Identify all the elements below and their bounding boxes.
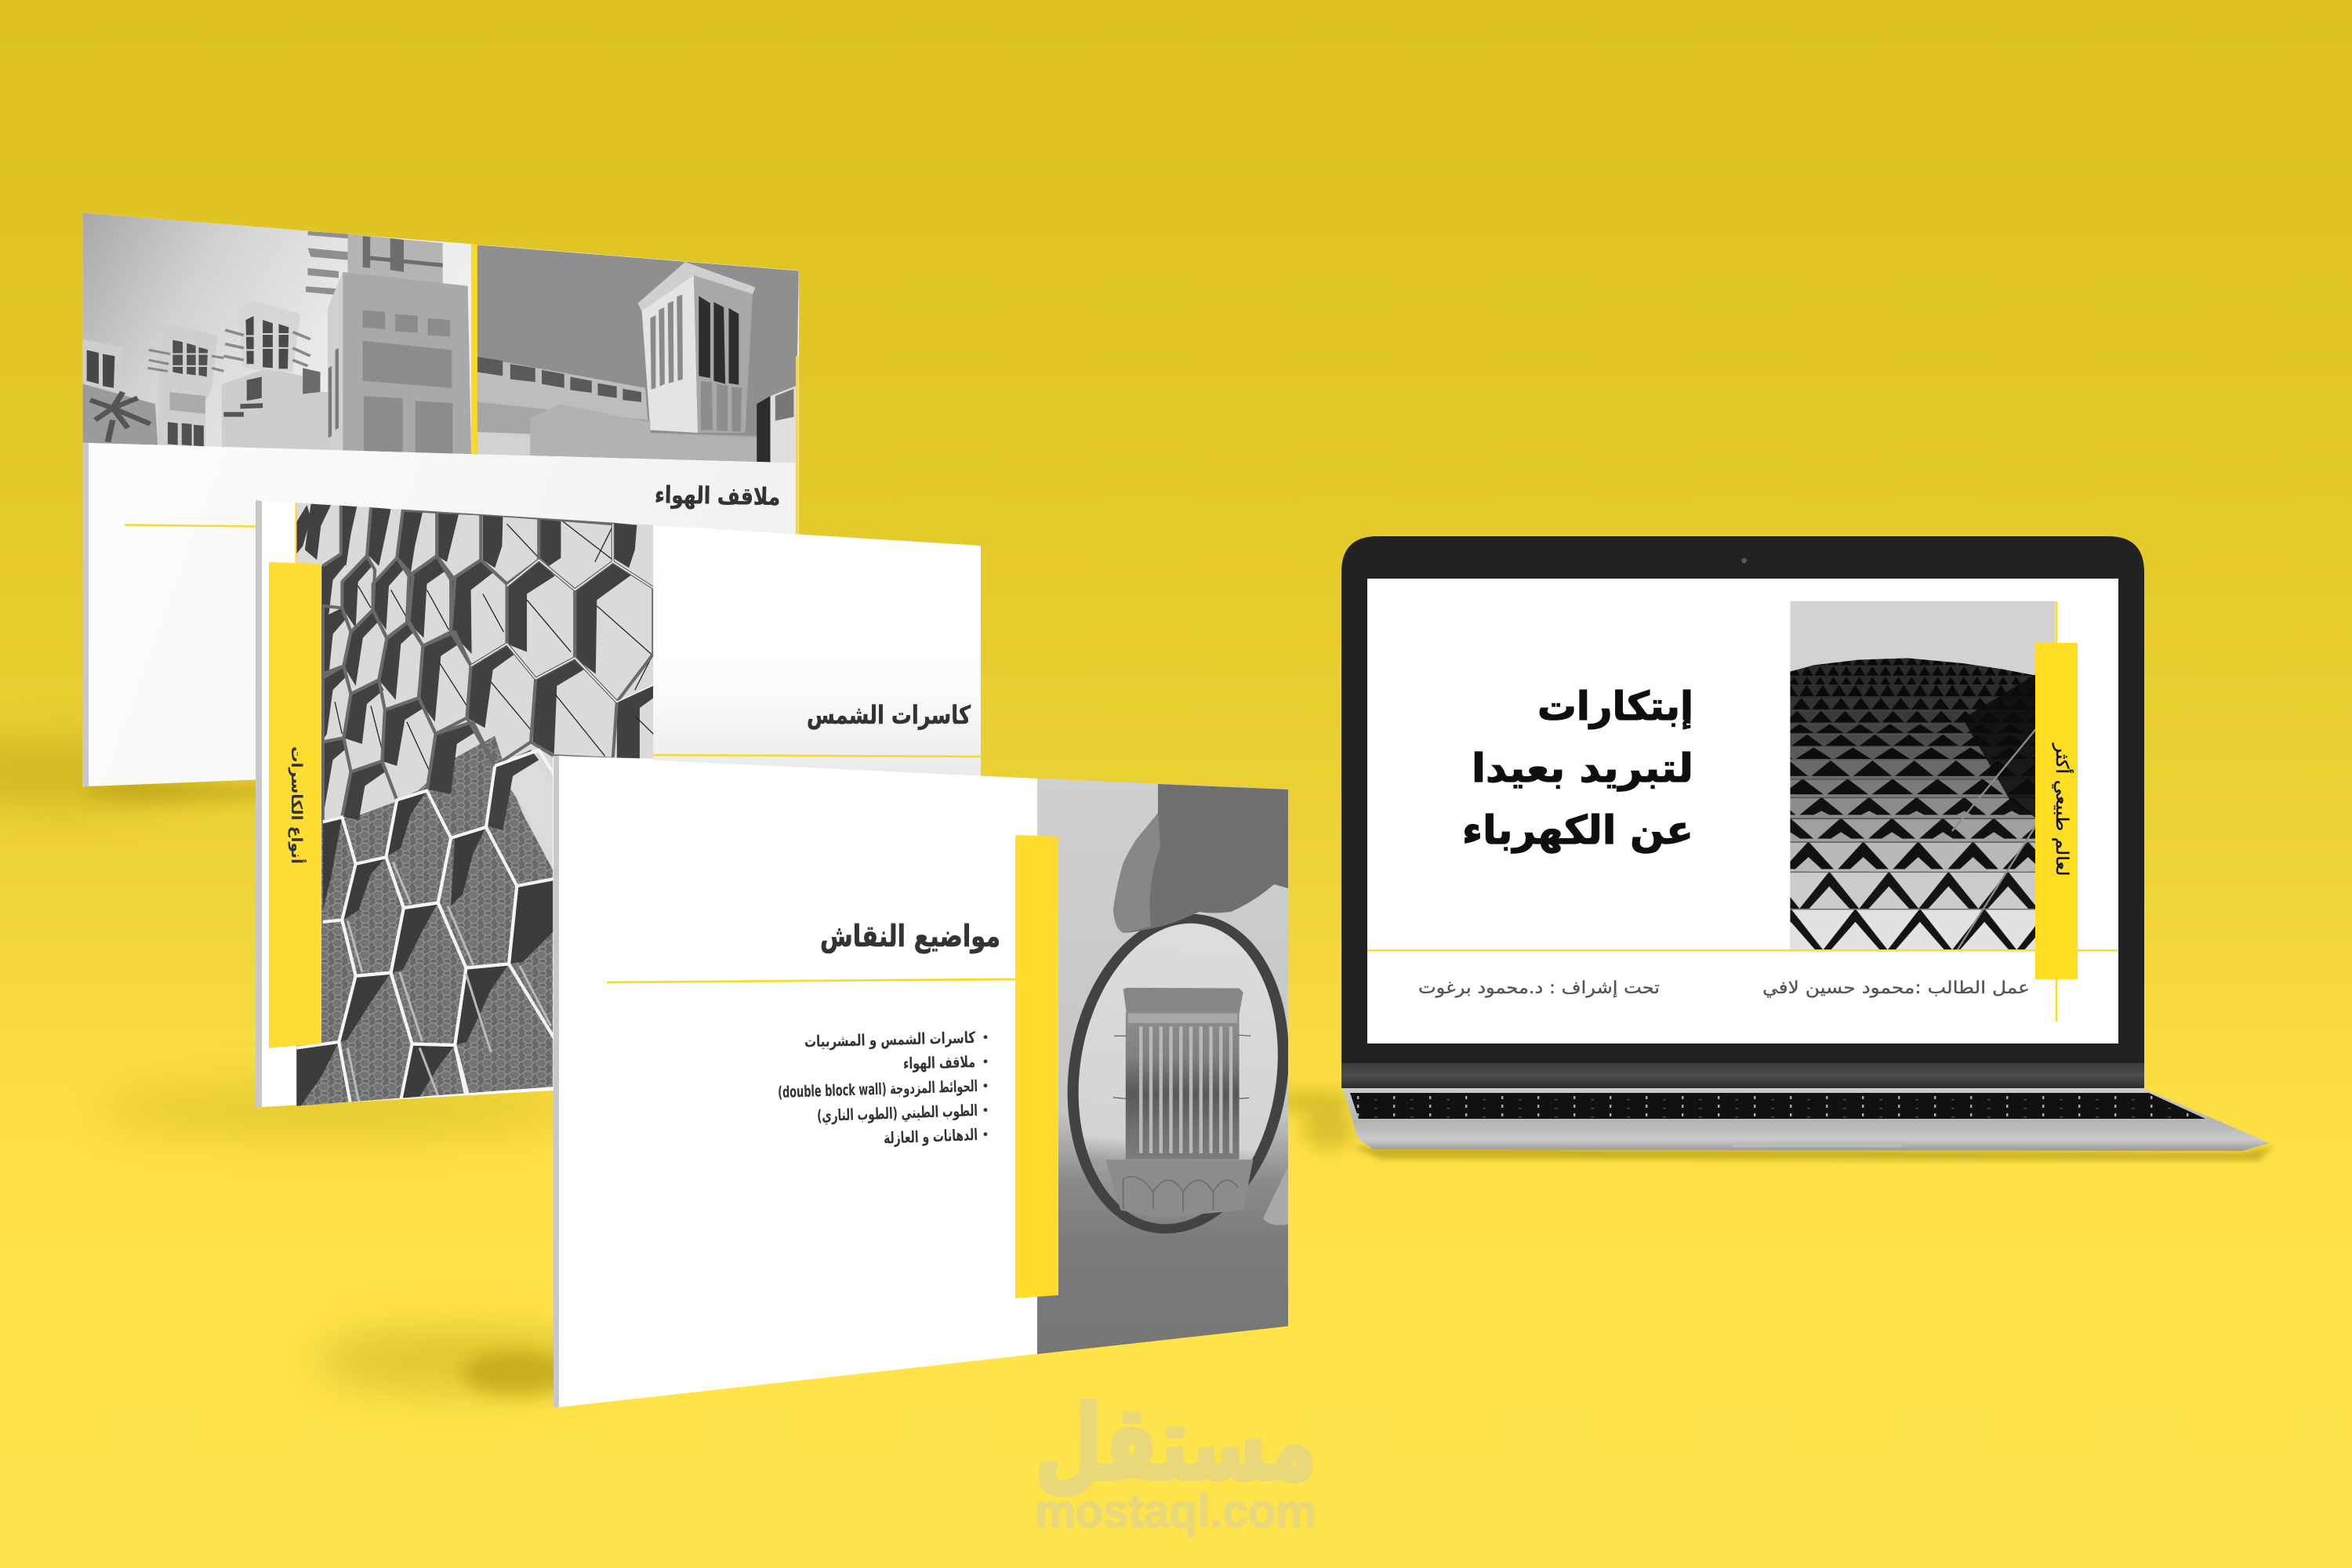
supervisor credit: تحت إشراف : د.محمود برغوت: [1418, 978, 1660, 998]
yellow edge line: [796, 356, 798, 535]
topics list: [778, 1028, 988, 1148]
rotated tab label: أنواع الكاسرات: [288, 746, 307, 864]
title line 2: لتبريد بعيدا: [1472, 746, 1693, 792]
yellow divider: [653, 755, 981, 757]
watermark arabic: مستقل: [1035, 1384, 1317, 1503]
inner frame strips: [347, 862, 551, 1102]
card 3 spine and page: [554, 756, 1037, 1407]
card 2 spine and page: [256, 500, 981, 1108]
yellow divider: [607, 979, 1015, 982]
tower inside lens: [1105, 988, 1253, 1218]
photo: hexagon facade: [291, 494, 659, 1118]
heading: wind catchers: ملاقف الهواء: [655, 481, 780, 511]
photo: wind towers left: [83, 212, 471, 454]
yellow thread: [2056, 601, 2057, 1022]
yellow divider: [125, 525, 256, 527]
photo divider: [471, 244, 477, 455]
laptop: [1341, 536, 2270, 1151]
thin mullions: [335, 520, 653, 770]
panel: slide 1 wind catchers: [82, 212, 799, 787]
title line 3: عن الكهرباء: [1462, 808, 1693, 854]
pale band: [510, 785, 517, 798]
rotated tab label: لعالم طبيعي أكثر: [2052, 742, 2074, 877]
watermark logo: [1035, 1384, 1317, 1537]
ground shadows: [0, 741, 2274, 1396]
heading: sun breakers: كاسرات الشمس: [807, 700, 971, 730]
item 2: ملاقف الهواء: [903, 1052, 975, 1073]
item 4: [817, 1101, 988, 1126]
heading: discussion topics: مواضيع النقاش: [820, 919, 1000, 953]
keyboard deck: [1343, 1088, 2270, 1151]
yellow divider right: [2078, 949, 2118, 952]
photo: magnifier on wind tower: [1037, 779, 1301, 1354]
hinge: [1341, 1063, 2144, 1088]
yellow tab: [1015, 835, 1058, 1298]
card 1 spine and page: [82, 212, 799, 787]
lower building reflection: [296, 736, 559, 1110]
photo: wind tower right: [477, 245, 799, 463]
lower hexagon outlines: [296, 750, 559, 1118]
finger: [1113, 784, 1288, 933]
yellow tab: [2035, 643, 2078, 979]
panel: slide 2 sun breakers: [256, 494, 981, 1118]
watermark latin: mostaql.com: [1035, 1485, 1316, 1537]
panel: slide 3 discussion topics: [554, 756, 1301, 1407]
screen: title slide: [1367, 579, 2118, 1044]
item 3: الحوائط المزدوجة (double block wall): [778, 1076, 978, 1102]
title text: [1462, 684, 1693, 854]
lens: [1068, 914, 1288, 1234]
left yellow thread: [295, 503, 296, 562]
dark triangles of lower hexagons: [296, 791, 559, 1106]
student credit: عمل الطالب :محمود حسين لافي: [1762, 978, 2030, 998]
lid: [1341, 536, 2144, 1063]
pale hexagon highlights: [471, 524, 653, 702]
item 5: الدهانات و العازلة: [884, 1125, 978, 1148]
upper hexagon outlines: [323, 505, 653, 864]
item 4: الطوب الطيني (الطوب الناري): [817, 1101, 978, 1126]
photo: dome facade: [1790, 601, 2056, 950]
dark upper frames: [296, 504, 653, 830]
title line 1: إبتكارات: [1537, 684, 1693, 730]
webcam: [1741, 558, 1747, 563]
item 1: كاسرات الشمس و المشربيات: [804, 1028, 976, 1051]
yellow divider: [1367, 949, 2035, 952]
yellow tab: [269, 562, 321, 1048]
